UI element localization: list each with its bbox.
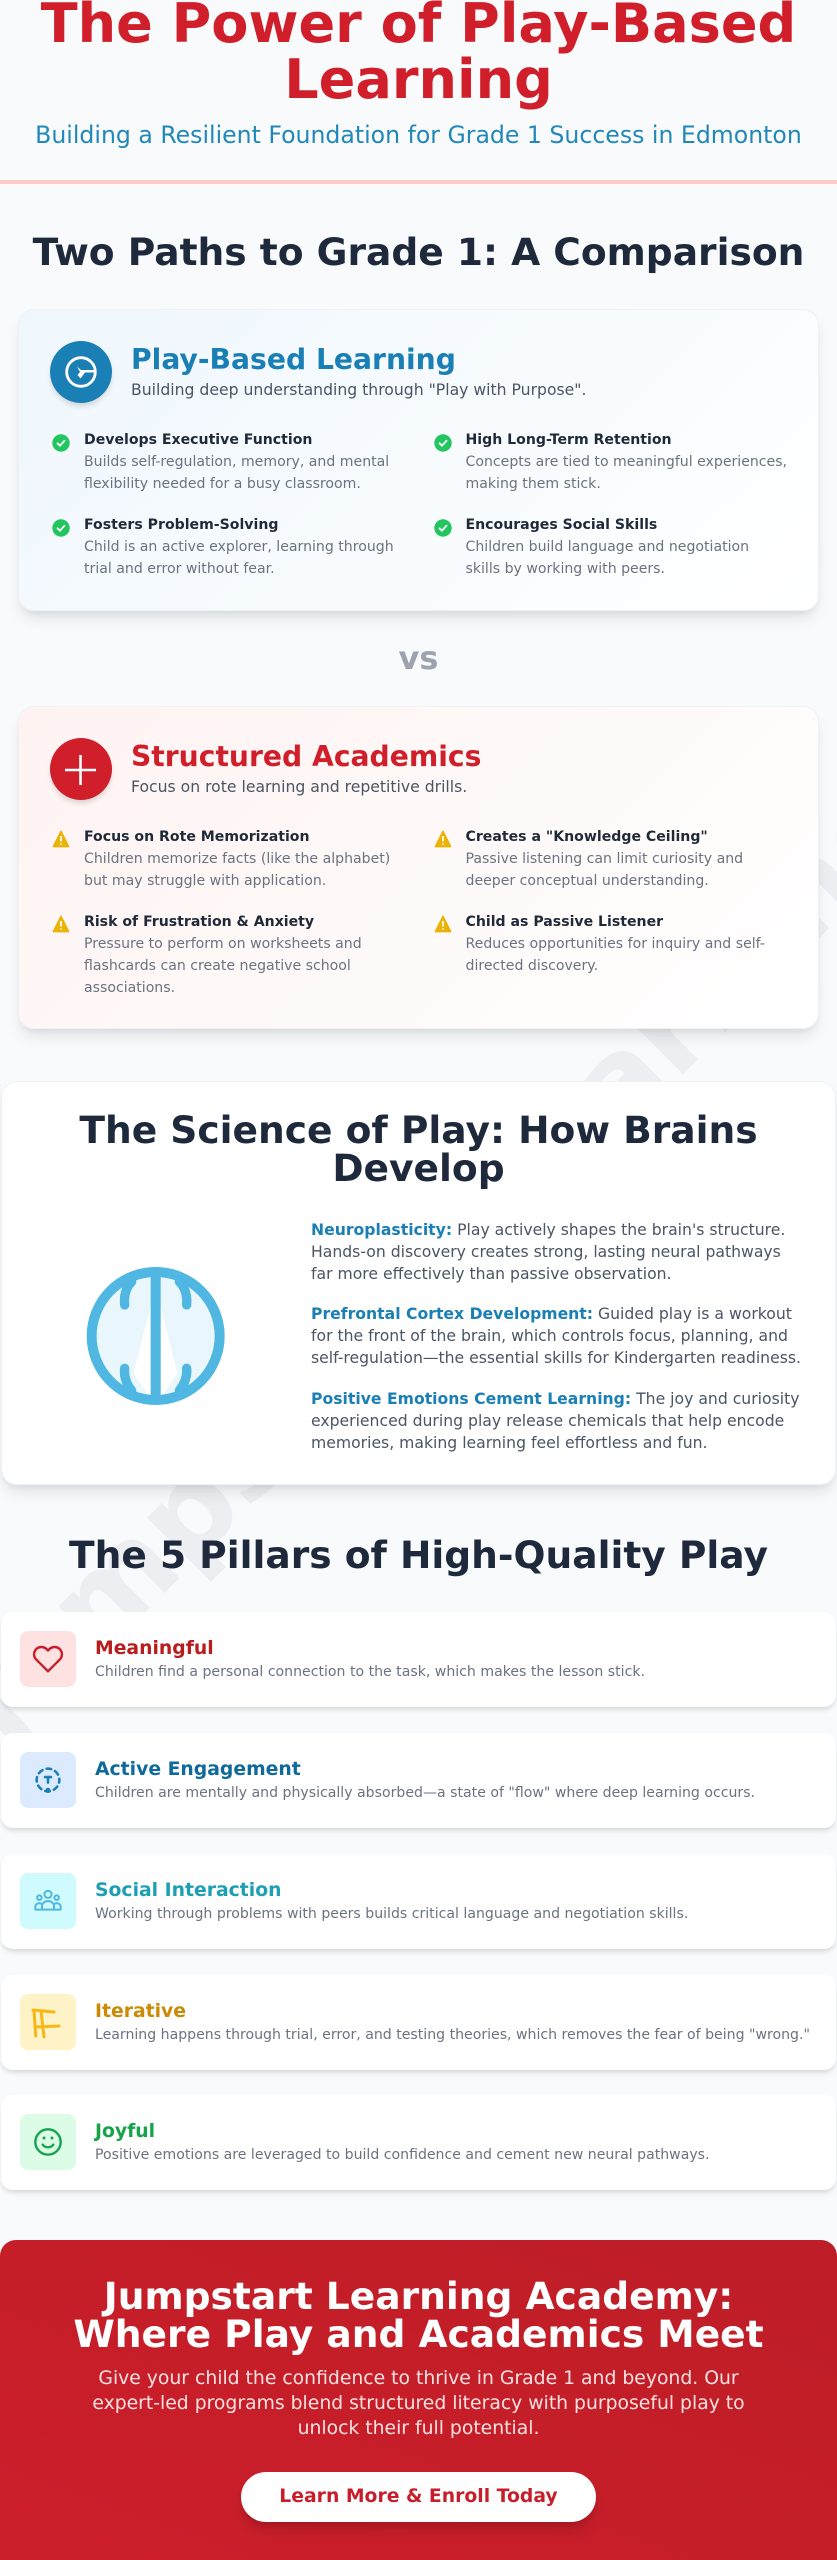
cta heading: Jumpstart Learning Academy: xyxy=(104,2274,733,2318)
header divider xyxy=(0,180,837,184)
item: social skills: Children build language and negotiation xyxy=(466,539,749,555)
cta button xyxy=(241,2472,596,2522)
item: frustration and anxiety: associations. xyxy=(84,980,175,996)
heading: science of play: The Science of Play: How Brains xyxy=(79,1108,758,1152)
icon: play target xyxy=(50,341,112,403)
cta heading: Where Play and Academics Meet xyxy=(73,2312,764,2356)
item: knowledge ceiling: Creates a "Knowledge Ceiling" xyxy=(466,829,708,845)
item: frustration and anxiety xyxy=(52,914,362,996)
subtitle: Building a Resilient Foundation for Grade 1 Success in Edmonton xyxy=(35,121,802,149)
item: knowledge ceiling: Passive listening can limit curiosity and xyxy=(466,851,743,867)
heading: play-based learning: Play-Based Learning xyxy=(131,343,456,376)
item: problem-solving xyxy=(52,517,394,577)
panel: science of play xyxy=(1,1081,836,1485)
description: Children are mentally and physically absorbed—a state of "flow" where deep learning occurs. xyxy=(95,1785,755,1801)
item: problem-solving: Child is an active explorer, learning through xyxy=(84,539,394,555)
item: problem-solving: Fosters Problem-Solving xyxy=(84,517,278,533)
text: positive emotions xyxy=(311,1389,799,1452)
title: Active Engagement xyxy=(95,1759,301,1780)
item: frustration and anxiety: Pressure to perform on worksheets and xyxy=(84,936,362,952)
item: passive listener xyxy=(434,914,765,974)
description: Positive emotions are leveraged to build confidence and cement new neural pathways. xyxy=(95,2147,710,2163)
text: neuroplasticity xyxy=(311,1220,785,1283)
item: long-term retention xyxy=(434,432,787,492)
cta text xyxy=(92,2368,745,2439)
pillar: meaningful xyxy=(1,1612,836,1707)
description: Children find a personal connection to the task, which makes the lesson stick. xyxy=(95,1664,645,1680)
item: rote memorization: Children memorize facts (like the alphabet) xyxy=(84,851,390,867)
text: prefrontal cortex: Prefrontal Cortex Development: Guided play is a workout xyxy=(311,1304,792,1323)
title: Meaningful xyxy=(95,1638,214,1659)
panel: play-based learning xyxy=(18,309,819,611)
cta heading xyxy=(73,2274,764,2356)
item: long-term retention: High Long-Term Retention xyxy=(466,432,672,448)
heading: science of play: Develop xyxy=(332,1146,505,1190)
item: passive listener: Reduces opportunities for inquiry and self- xyxy=(466,936,765,952)
title: Learning xyxy=(284,48,553,111)
text: positive emotions: experienced during play release chemicals that help encode xyxy=(311,1411,784,1430)
item: passive listener: Child as Passive Listener xyxy=(466,914,663,930)
item: executive function: Develops Executive Function xyxy=(84,432,312,448)
item: frustration and anxiety: flashcards can create negative school xyxy=(84,958,351,974)
icon: people xyxy=(20,1873,76,1929)
text: prefrontal cortex: self-regulation—the essential skills for Kindergarten readiness. xyxy=(311,1348,801,1367)
pillar: joyful xyxy=(1,2095,836,2190)
cta button: Learn More & Enroll Today xyxy=(279,2486,558,2507)
pillar: active engagement xyxy=(1,1733,836,1828)
item: frustration and anxiety: Risk of Frustration & Anxiety xyxy=(84,914,314,930)
pillar: social interaction xyxy=(1,1854,836,1949)
icon: heart xyxy=(20,1631,76,1687)
item: executive function xyxy=(52,432,389,492)
description: Working through problems with peers builds critical language and negotiation skills. xyxy=(95,1906,688,1922)
panel: structured academics xyxy=(18,706,819,1029)
item: social skills: skills by working with peers. xyxy=(466,561,665,577)
item: long-term retention: Concepts are tied to meaningful experiences, xyxy=(466,454,787,470)
item: social skills: Encourages Social Skills xyxy=(466,517,657,533)
text: positive emotions: memories, making learning feel effortless and fun. xyxy=(311,1433,708,1452)
cta text: Give your child the confidence to thrive in Grade 1 and beyond. Our xyxy=(98,2368,739,2389)
item: knowledge ceiling: deeper conceptual understanding. xyxy=(466,873,709,889)
item: passive listener: directed discovery. xyxy=(466,958,598,974)
item: rote memorization xyxy=(52,829,390,889)
cta text: expert-led programs blend structured literacy with purposeful play to xyxy=(92,2393,745,2414)
description: Learning happens through trial, error, and testing theories, which removes the fear of being "wrong." xyxy=(95,2027,810,2043)
text: neuroplasticity: far more effectively than passive observation. xyxy=(311,1264,672,1283)
tagline: Building deep understanding through "Play with Purpose". xyxy=(131,380,586,398)
icon: plus xyxy=(50,738,112,800)
icon: smile xyxy=(20,2114,76,2170)
item: rote memorization: Focus on Rote Memorization xyxy=(84,829,310,845)
item: long-term retention: making them stick. xyxy=(466,476,601,492)
heading: structured academics: Structured Academics xyxy=(131,740,481,773)
title: Iterative xyxy=(95,2001,186,2022)
item: rote memorization: but may struggle with application. xyxy=(84,873,326,889)
item: social skills xyxy=(434,517,749,577)
heading: two paths: Two Paths to Grade 1: A Comparison xyxy=(33,230,804,274)
text: prefrontal cortex: for the front of the brain, which controls focus, planning, and xyxy=(311,1326,788,1345)
cta text: unlock their full potential. xyxy=(298,2418,539,2439)
item: executive function: flexibility needed for a busy classroom. xyxy=(84,476,361,492)
icon: focus xyxy=(20,1752,76,1808)
heading: five pillars: The 5 Pillars of High-Quality Play xyxy=(69,1533,768,1577)
text: prefrontal cortex xyxy=(311,1304,801,1367)
item: executive function: Builds self-regulation, memory, and mental xyxy=(84,454,389,470)
item: knowledge ceiling xyxy=(434,829,743,889)
title: Social Interaction xyxy=(95,1880,281,1901)
icon: scribble xyxy=(20,1994,76,2050)
title: Joyful xyxy=(95,2121,155,2142)
panel: call to action xyxy=(0,2240,837,2560)
item: problem-solving: trial and error without fear. xyxy=(84,561,275,577)
vs label: vs xyxy=(399,638,438,676)
text: neuroplasticity: Hands-on discovery creates strong, lasting neural pathways xyxy=(311,1242,781,1261)
text: positive emotions: Positive Emotions Cement Learning: The joy and curiosity xyxy=(311,1389,799,1408)
icon: brain xyxy=(86,1267,225,1405)
title xyxy=(41,0,796,111)
pillar: iterative xyxy=(1,1975,836,2070)
heading: science of play xyxy=(79,1108,758,1190)
tagline: Focus on rote learning and repetitive drills. xyxy=(131,776,467,796)
text: neuroplasticity: Neuroplasticity: Play actively shapes the brain's structure. xyxy=(311,1220,785,1239)
